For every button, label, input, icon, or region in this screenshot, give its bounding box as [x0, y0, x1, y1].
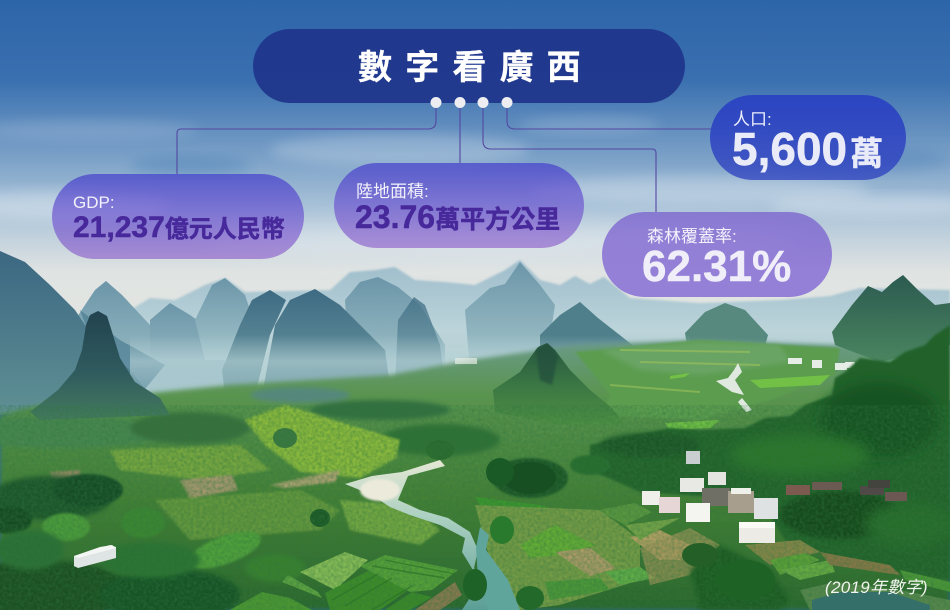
- far mountain range: [80, 260, 950, 400]
- clouds: [0, 116, 950, 256]
- source note: (2019年數字): [825, 578, 928, 597]
- population label: 人口:: [733, 110, 772, 129]
- GDP label: GDP:: [73, 193, 115, 212]
- forest coverage value: 62.31%: [642, 242, 791, 291]
- connector: forest coverage: [483, 108, 656, 212]
- right misty peaks: [832, 275, 950, 362]
- far village: [455, 358, 855, 370]
- connector: GDP: [177, 108, 436, 174]
- trees by river: [463, 458, 775, 610]
- land area value: 23.76萬平方公里: [355, 199, 560, 235]
- panel: forest coverage: [602, 212, 832, 297]
- title text: 數字看廣西: [358, 49, 594, 87]
- ground base: [0, 340, 950, 610]
- far river: [716, 363, 752, 412]
- connector dots: [430, 97, 512, 108]
- bottom centre crop fields: [230, 552, 462, 610]
- connector: population: [507, 108, 711, 129]
- mid-ground tree belts: [0, 387, 500, 456]
- GDP value: 21,237億元人民幣: [73, 211, 285, 244]
- foliage texture: [0, 405, 950, 610]
- connector lines: [177, 108, 711, 212]
- panel: GDP: [52, 174, 304, 259]
- population value: 5,600萬: [732, 123, 883, 175]
- mid mountains: [75, 262, 768, 405]
- valley fields far right: [575, 340, 840, 430]
- sky: [0, 0, 950, 400]
- icon: village houses: [642, 451, 907, 543]
- bright fields centre left: [50, 405, 440, 545]
- dark peak left: [30, 311, 170, 420]
- dark tree masses: [0, 428, 454, 610]
- connector: land area: [459, 108, 461, 163]
- panel: population: [710, 95, 906, 180]
- river: [345, 460, 495, 610]
- panel: land area: [334, 163, 584, 248]
- title pill: [253, 29, 685, 103]
- right forested hillside: [492, 325, 950, 580]
- land area label: 陸地面積:: [356, 182, 429, 201]
- forest coverage label: 森林覆蓋率:: [647, 227, 737, 246]
- green peak centre: [493, 343, 625, 425]
- valley mist: [130, 335, 690, 410]
- pond: [812, 592, 930, 610]
- icon: left farmhouse: [74, 545, 116, 568]
- big left mountain: [0, 251, 150, 415]
- bottom right fields: [475, 497, 950, 610]
